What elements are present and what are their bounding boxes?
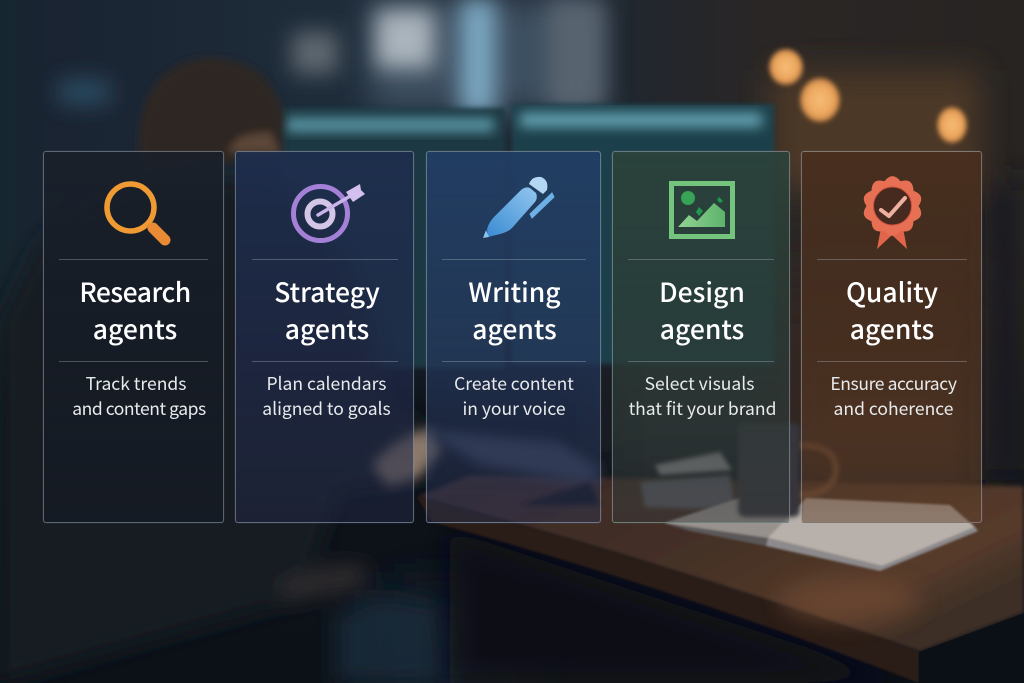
description: strategy: aligned to goals	[262, 396, 391, 421]
papers	[655, 452, 732, 475]
icon: magnifying glass	[104, 181, 170, 246]
icon: target with arrow	[291, 184, 365, 243]
description: writing: in your voice	[462, 396, 566, 421]
heading: Quality agents	[846, 270, 938, 346]
heading: Writing agents: agents	[472, 308, 557, 346]
bokeh lights	[769, 49, 967, 143]
heading: Research agents: Research	[79, 270, 191, 310]
icon: pen	[483, 176, 554, 238]
heading: Writing agents: Writing	[468, 270, 561, 310]
heading: Quality agents: agents	[850, 308, 934, 346]
mug handle	[798, 445, 836, 495]
description: quality: and coherence	[834, 396, 953, 421]
heading: Strategy agents: Strategy	[274, 270, 380, 310]
desk reflection	[780, 578, 920, 622]
mug body	[738, 423, 800, 517]
heading: Research agents	[79, 270, 191, 346]
keyboard	[425, 430, 602, 485]
description: writing	[454, 371, 574, 421]
person body	[0, 178, 430, 683]
heading: Design agents: Design	[659, 270, 745, 310]
description: research	[72, 371, 206, 421]
person head	[139, 58, 283, 175]
heading: Research agents: agents	[93, 308, 177, 346]
heading: Strategy agents: agents	[285, 308, 369, 346]
card: Strategy agents	[235, 151, 414, 523]
heading: Design agents	[659, 270, 745, 346]
desk front edge	[417, 497, 919, 683]
description: design	[629, 371, 776, 421]
description: quality: Ensure accuracy	[830, 371, 957, 396]
monitors	[281, 108, 505, 368]
description: writing: Create content	[454, 371, 574, 396]
forearm and hand	[372, 428, 442, 486]
notebook	[664, 497, 978, 571]
description: strategy: Plan calendars	[266, 371, 387, 396]
icon: picture frame	[669, 181, 735, 239]
card: Writing agents	[426, 151, 601, 523]
card: Quality agents	[801, 151, 982, 523]
description: research: and content gaps	[72, 396, 206, 421]
heading: Quality agents: Quality	[846, 270, 938, 310]
card: Research agents	[43, 151, 224, 523]
heading: Design agents: agents	[660, 308, 744, 346]
description: design: Select visuals	[645, 371, 754, 396]
heading: Writing agents	[468, 270, 561, 346]
area under desk	[450, 530, 915, 683]
card: Design agents	[612, 151, 790, 523]
description: design: that fit your brand	[629, 396, 776, 421]
chair arm and torso	[275, 566, 372, 598]
heading: Strategy agents	[274, 270, 380, 346]
description: research: Track trends	[86, 371, 186, 396]
icon: ribbon badge	[864, 176, 922, 249]
description: quality	[830, 371, 957, 421]
desk	[417, 475, 1024, 652]
description: strategy	[262, 371, 391, 421]
